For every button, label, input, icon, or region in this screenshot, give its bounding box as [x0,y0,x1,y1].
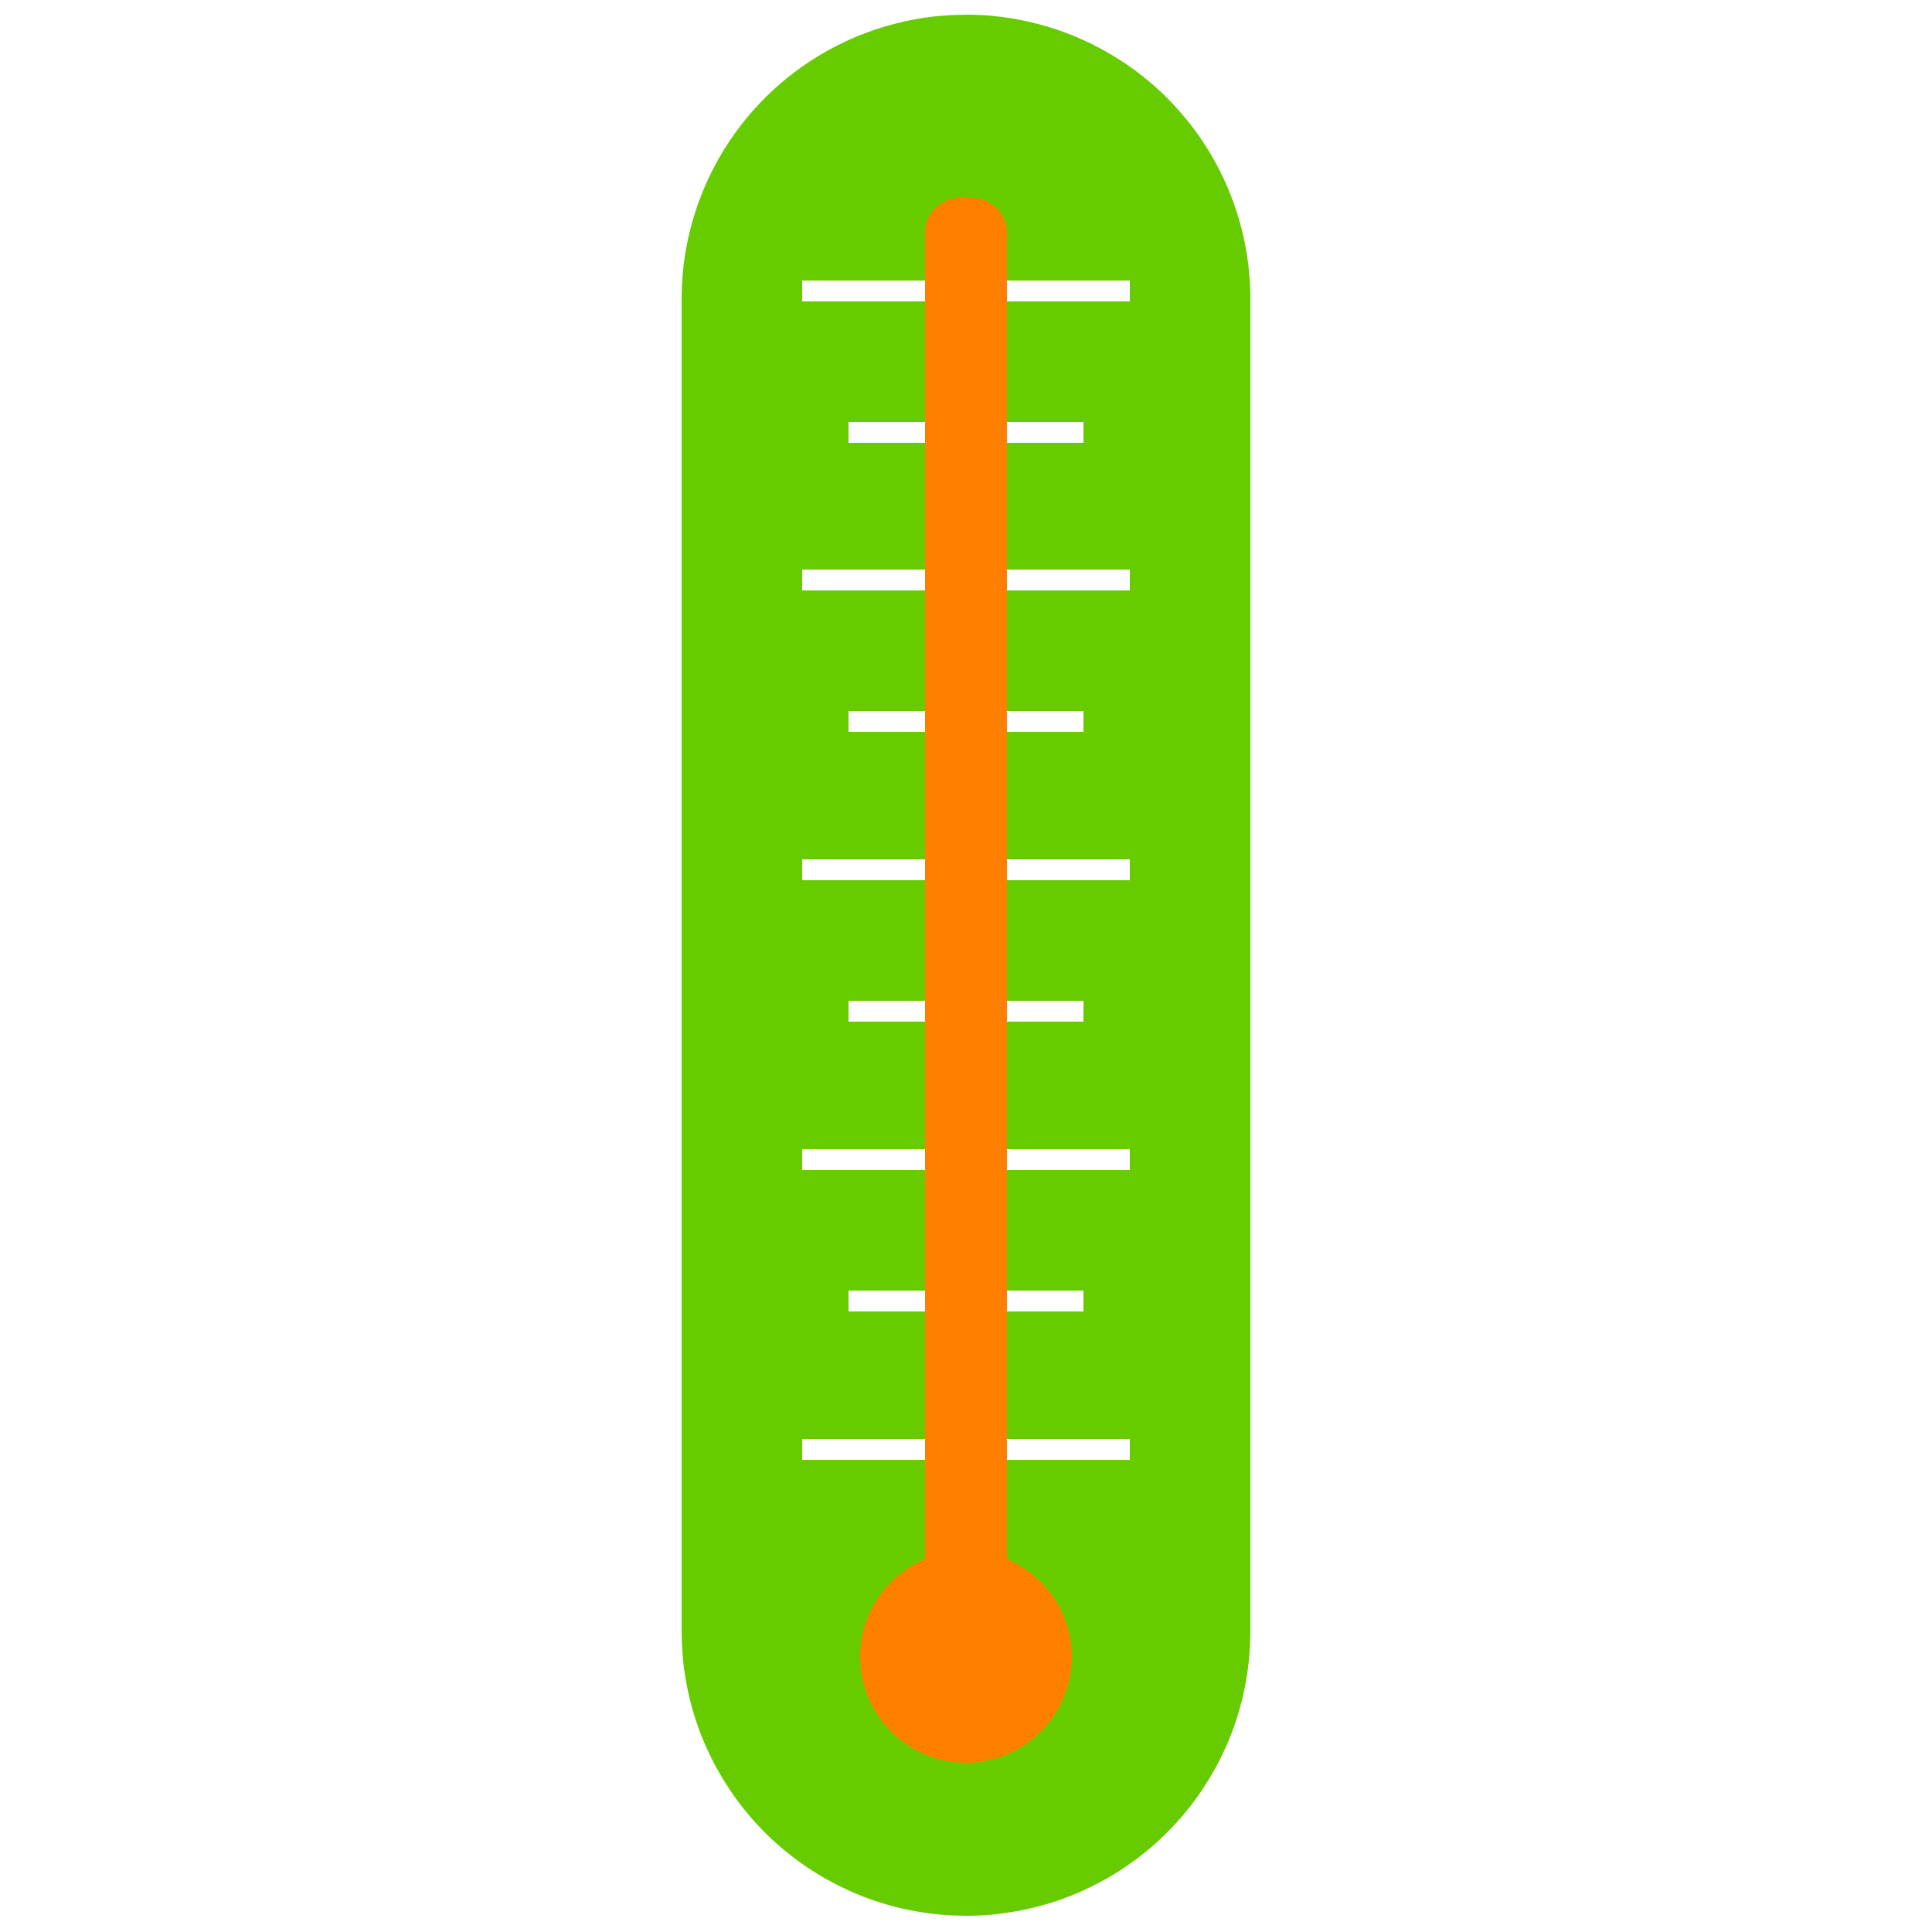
mercury column and bulb [860,197,1072,1763]
scale ticks [802,281,1130,1460]
thermometer body: green rounded panel [682,15,1250,1916]
